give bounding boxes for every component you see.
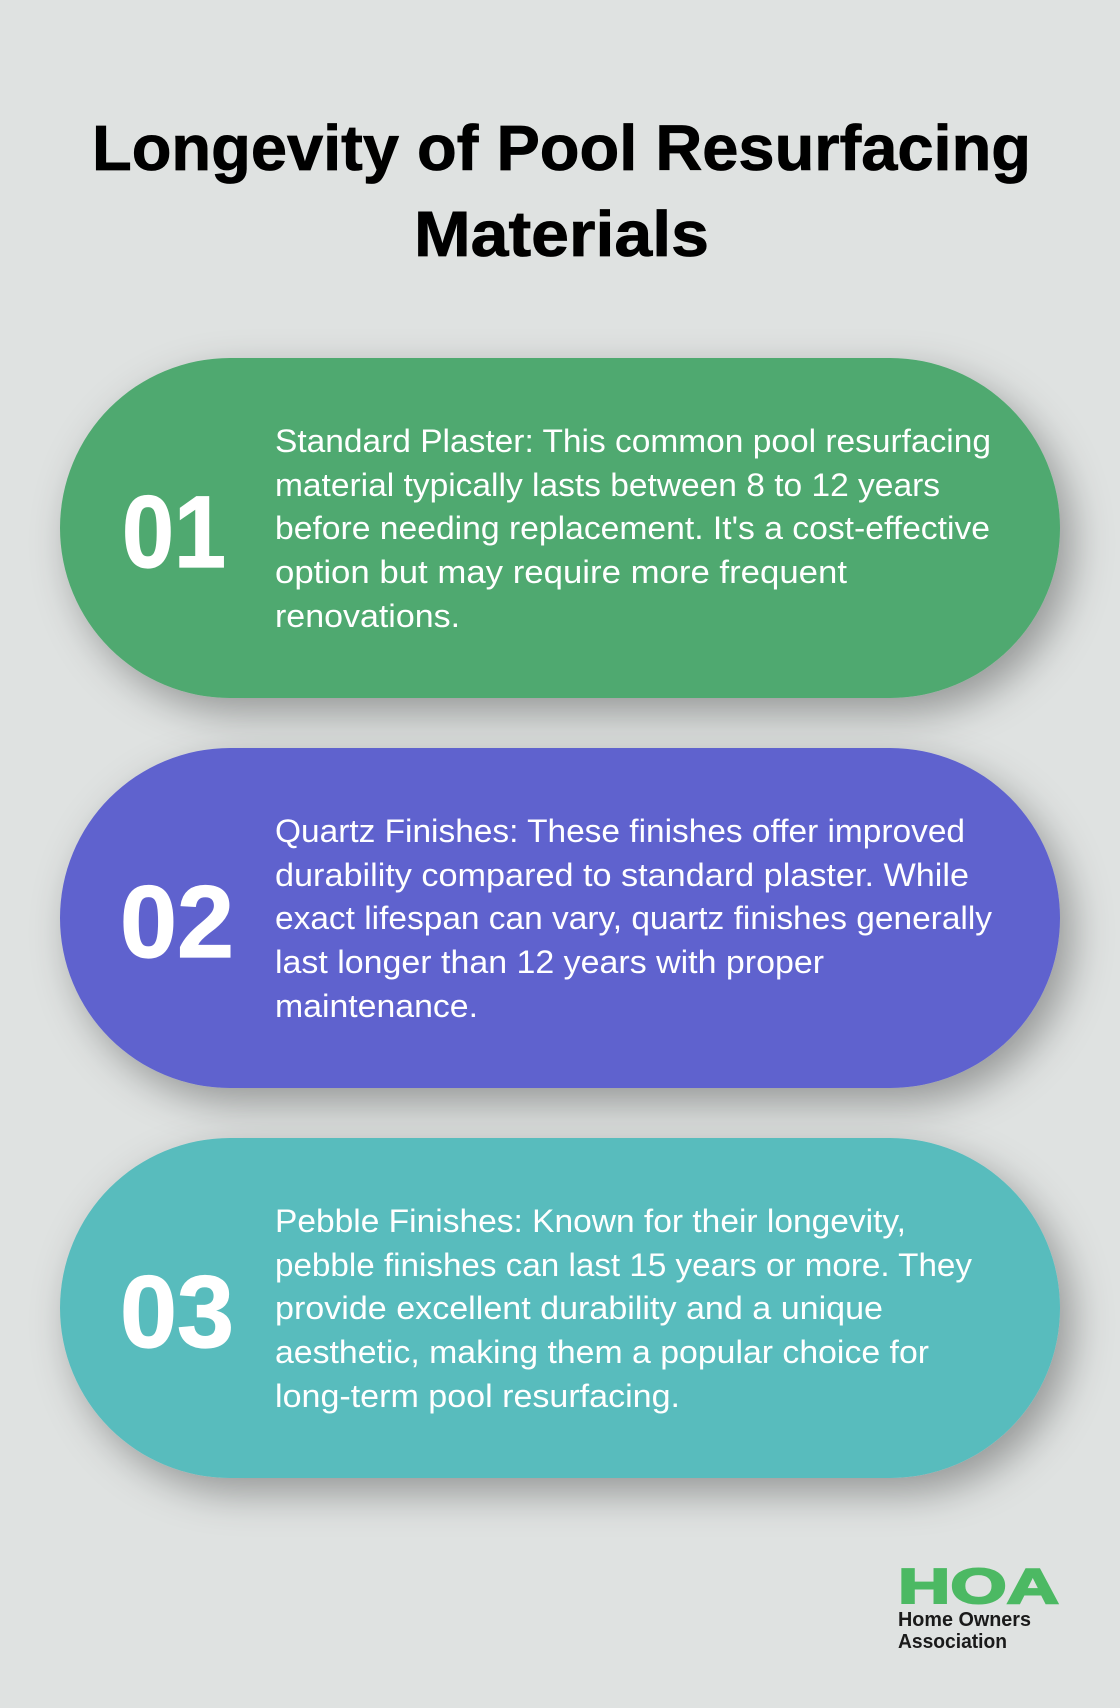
text: standard plaster: material typically lasts between 8 to 12 years bbox=[275, 467, 940, 503]
text: standard plaster: before needing replacement. It's a cost-effective bbox=[275, 510, 990, 546]
logo: HOA Home Owners Association: Home Owners bbox=[898, 1609, 1031, 1631]
number 03: 03 bbox=[120, 1255, 234, 1369]
title: Longevity of Pool Resurfacing bbox=[92, 112, 1031, 184]
text: quartz finishes: exact lifespan can vary, quartz finishes generally bbox=[275, 900, 992, 936]
title bbox=[92, 112, 1031, 270]
text: pebble finishes: aesthetic, making them a popular choice for bbox=[275, 1334, 929, 1370]
text: pebble finishes: pebble finishes can last 15 years or more. They bbox=[275, 1247, 972, 1283]
panel: 03 pebble finishes bbox=[60, 1138, 1060, 1478]
text: quartz finishes: Quartz Finishes: These finishes offer improved bbox=[275, 813, 965, 849]
text: pebble finishes: long-term pool resurfacing. bbox=[275, 1378, 680, 1414]
logo: HOA Home Owners Association: HOA bbox=[898, 1560, 1059, 1614]
title: Materials bbox=[414, 198, 709, 270]
text: quartz finishes: durability compared to standard plaster. While bbox=[275, 857, 969, 893]
text: pebble finishes: provide excellent durability and a unique bbox=[275, 1290, 883, 1326]
panel: 02 quartz finishes bbox=[60, 748, 1060, 1088]
panel: 01 standard plaster bbox=[60, 358, 1060, 698]
text: quartz finishes: maintenance. bbox=[275, 988, 478, 1024]
text: standard plaster: Standard Plaster: This common pool resurfacing bbox=[275, 423, 991, 459]
logo: HOA Home Owners Association bbox=[898, 1560, 1059, 1653]
number 01: 01 bbox=[122, 475, 226, 589]
text: standard plaster: renovations. bbox=[275, 598, 460, 634]
text: pebble finishes bbox=[275, 1203, 972, 1414]
text: quartz finishes bbox=[275, 813, 992, 1024]
text: standard plaster: option but may require more frequent bbox=[275, 554, 847, 590]
text: standard plaster bbox=[275, 423, 991, 634]
number 02: 02 bbox=[120, 865, 234, 979]
text: quartz finishes: last longer than 12 years with proper bbox=[275, 944, 824, 980]
logo: HOA Home Owners Association: Association bbox=[898, 1631, 1007, 1653]
text: pebble finishes: Pebble Finishes: Known for their longevity, bbox=[275, 1203, 906, 1239]
